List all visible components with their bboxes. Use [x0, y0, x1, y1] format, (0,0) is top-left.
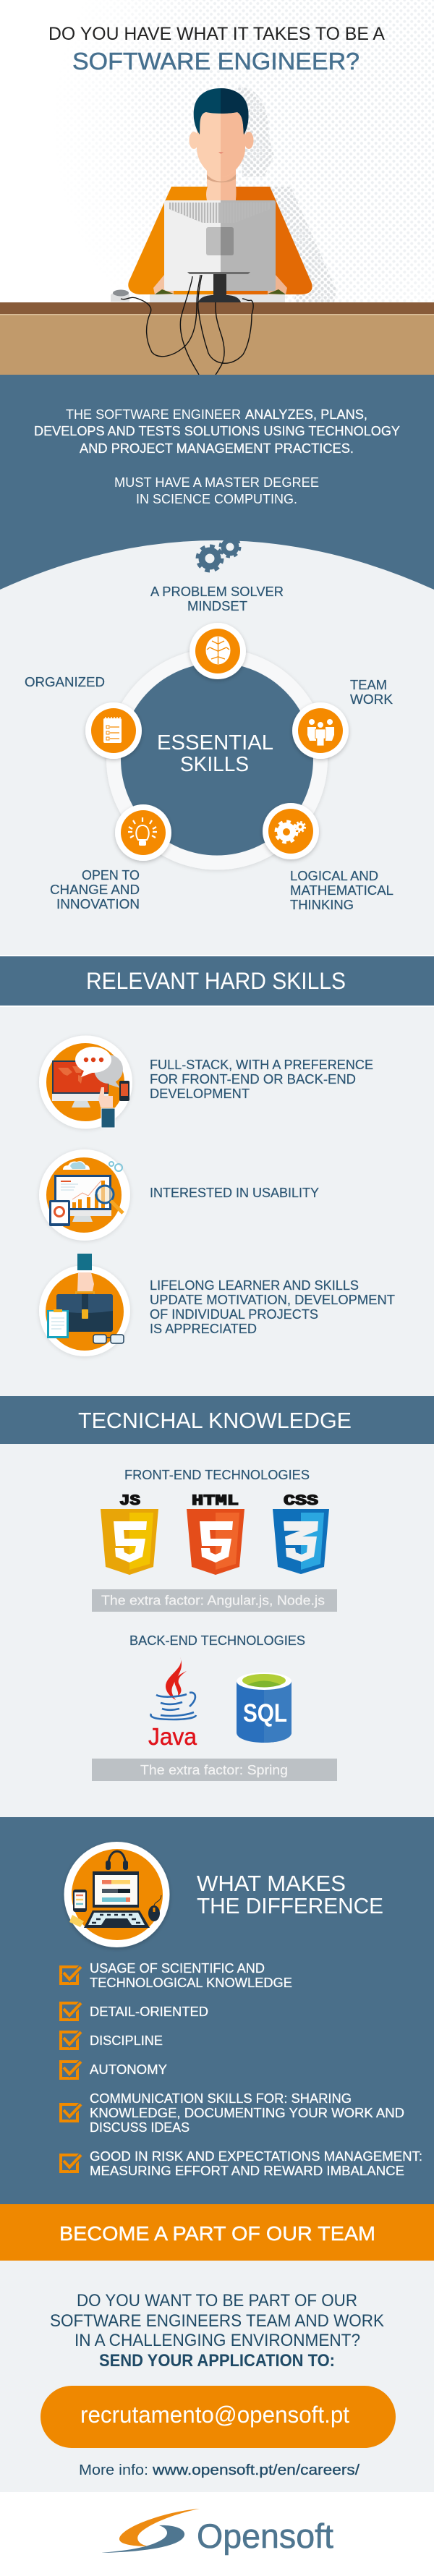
checklist item: usage: TECHNOLOGICAL KNOWLEDGE: [90, 1975, 292, 1990]
text: full-stack: DEVELOPMENT: [150, 1086, 250, 1101]
checklist item: detail-oriented: DETAIL-ORIENTED: [90, 2004, 208, 2019]
email button: [41, 2386, 396, 2448]
hands: [153, 275, 287, 294]
text: usability: INTERESTED IN USABILITY: [150, 1185, 319, 1200]
title: SOFTWARE ENGINEER?: [72, 48, 359, 75]
heading: what makes the difference: THE DIFFERENCE: [197, 1893, 383, 1918]
heading: essential skills: SKILLS: [180, 753, 249, 776]
text: full-stack: FULL-STACK, WITH A PREFERENCE: [150, 1057, 373, 1072]
band: relevant hard skills: [0, 955, 434, 1007]
label: open to change: INNOVATION: [56, 896, 140, 911]
more info: [79, 2462, 359, 2478]
label: logical thinking: [290, 868, 393, 912]
text: full-stack: [150, 1057, 373, 1101]
header background halftone: [106, 0, 434, 302]
panel: technical knowledge: [0, 1444, 434, 1817]
label: problem solver: A PROBLEM SOLVER: [150, 584, 284, 599]
intro paragraph: MUST HAVE A MASTER DEGREE: [114, 475, 319, 490]
logo: css: [273, 1493, 329, 1574]
email button: recrutamento@opensoft.pt: [80, 2402, 349, 2428]
band: technical knowledge: TECNICHAL KNOWLEDGE: [78, 1408, 352, 1433]
face: [197, 109, 245, 177]
checklist item: discipline: [61, 2032, 163, 2049]
text: lifelong learner: [150, 1278, 395, 1336]
icon: team: [292, 702, 349, 759]
icon: usability: [39, 1149, 130, 1241]
icon: logic gears: [263, 803, 319, 859]
footer: opensoft logo: [0, 2492, 434, 2576]
desk: [0, 302, 434, 375]
label: logical thinking: THINKING: [290, 897, 354, 912]
icon: workstation: [64, 1842, 169, 1947]
heading: front-end: FRONT-END TECHNOLOGIES: [124, 1467, 310, 1482]
orange shirt: [128, 187, 312, 294]
panel: intro on blue: [0, 375, 434, 592]
icon: notepad: [85, 702, 142, 759]
label: open to change: OPEN TO: [82, 867, 140, 883]
monitor stand: [198, 274, 241, 302]
person drop shadow: [238, 87, 336, 302]
band: become a part of our team: [0, 2204, 434, 2261]
intro paragraph: AND PROJECT MANAGEMENT PRACTICES.: [80, 441, 354, 456]
label: problem solver: [150, 584, 284, 613]
logo: js: JS: [119, 1493, 140, 1510]
heading: back-end: BACK-END TECHNOLOGIES: [129, 1633, 305, 1648]
panel: what makes the difference: [0, 1817, 434, 2204]
label: team work: TEAM: [350, 677, 387, 692]
heading: essential skills: ESSENTIAL: [157, 731, 273, 754]
icon: brain: [190, 623, 246, 679]
extra factor: front-end: The extra factor: Angular.js, Node.js: [101, 1593, 325, 1607]
invitation text: SEND YOUR APPLICATION TO:: [99, 2351, 335, 2371]
logo wordmark: Opensoft: [197, 2517, 333, 2555]
skills ring: [106, 648, 328, 870]
text: lifelong learner: IS APPRECIATED: [150, 1321, 257, 1336]
extra factor: front-end: [92, 1589, 337, 1612]
checklist item: autonomy: AUTONOMY: [90, 2062, 167, 2077]
intro paragraph: THE SOFTWARE ENGINEER: [66, 407, 241, 422]
label: problem solver: MINDSET: [187, 598, 247, 613]
label: team work: WORK: [350, 692, 393, 707]
more info: More info:: [79, 2462, 148, 2478]
extra factor: back-end: [92, 1759, 337, 1781]
logo: sql: [237, 1672, 292, 1743]
checklist item: autonomy: [61, 2062, 167, 2078]
band: relevant hard skills: RELEVANT HARD SKILLS: [86, 968, 346, 994]
intro paragraph: DEVELOPS AND TESTS SOLUTIONS USING TECHNOLOGY: [34, 423, 400, 438]
cables: [121, 275, 253, 375]
logo: js: [101, 1493, 158, 1575]
intro paragraph: ANALYZES, PLANS,: [245, 407, 367, 422]
logo: java: Java: [148, 1723, 197, 1750]
checklist item: usage: USAGE OF SCIENTIFIC AND: [90, 1960, 265, 1976]
checklist item: usage: [61, 1960, 292, 1990]
heading: what makes the difference: [197, 1871, 383, 1918]
more info: www.opensoft.pt/en/careers/: [152, 2462, 359, 2478]
panel: call to action: [0, 2261, 434, 2492]
logo swoosh: [101, 2509, 200, 2553]
icon: briefcase: [39, 1254, 130, 1356]
text: lifelong learner: LIFELONG LEARNER AND SKILLS: [150, 1278, 359, 1293]
keyboard and mouse: [111, 289, 285, 302]
logo: html: [187, 1493, 244, 1575]
checklist item: risk management: MEASURING EFFORT AND REWARD IMBALANCE: [90, 2163, 404, 2178]
checklist item: communication: DISCUSS IDEAS: [90, 2120, 190, 2135]
label: logical thinking: LOGICAL AND: [290, 868, 378, 883]
heading: essential skills: [157, 731, 273, 776]
icon: gears: [197, 537, 240, 571]
intro paragraph: [34, 407, 400, 506]
neck and ears: [190, 132, 253, 203]
invitation text: [50, 2291, 384, 2371]
logo: java: [148, 1657, 197, 1750]
label: organized: ORGANIZED: [25, 674, 105, 689]
label: open to change: [50, 867, 140, 911]
title: DO YOU HAVE WHAT IT TAKES TO BE A: [48, 24, 385, 44]
checklist item: risk management: GOOD IN RISK AND EXPECTATIONS MANAGEMENT:: [90, 2148, 422, 2164]
checklist item: discipline: DISCIPLINE: [90, 2033, 163, 2048]
hair: [194, 88, 248, 135]
heading: what makes the difference: WHAT MAKES: [197, 1871, 346, 1896]
monitor back: [164, 200, 276, 291]
invitation text: IN A CHALLENGING ENVIRONMENT?: [75, 2331, 360, 2350]
icon: light bulb: [115, 804, 171, 861]
panel: essential skills: [0, 537, 434, 956]
invitation text: DO YOU WANT TO BE PART OF OUR: [77, 2291, 357, 2311]
intro paragraph: IN SCIENCE COMPUTING.: [136, 491, 297, 506]
text: lifelong learner: UPDATE MOTIVATION, DEVELOPMENT: [150, 1292, 395, 1307]
checklist item: communication: [61, 2091, 404, 2135]
logo: css: CSS: [284, 1493, 318, 1510]
invitation text: SOFTWARE ENGINEERS TEAM AND WORK: [50, 2311, 384, 2331]
text: full-stack: FOR FRONT-END OR BACK-END: [150, 1071, 356, 1087]
band: technical knowledge: [0, 1396, 434, 1444]
logo: sql: SQL: [243, 1699, 287, 1727]
checklist item: communication: KNOWLEDGE, DOCUMENTING YOUR WORK AND: [90, 2105, 404, 2120]
logo: html: HTML: [192, 1493, 239, 1510]
checklist item: communication: COMMUNICATION SKILLS FOR: SHARING: [90, 2091, 352, 2106]
text: lifelong learner: OF INDIVIDUAL PROJECTS: [150, 1306, 318, 1322]
illustration: engineer at desk: [0, 87, 434, 375]
band: become a part of our team: BECOME A PART OF OUR TEAM: [59, 2222, 375, 2245]
label: open to change: CHANGE AND: [50, 882, 140, 897]
extra factor: back-end: The extra factor: Spring: [140, 1762, 288, 1777]
icon: full-stack: [39, 1036, 132, 1128]
label: logical thinking: MATHEMATICAL: [290, 883, 393, 898]
panel: hard skills: [0, 1007, 434, 1396]
title: [48, 24, 385, 75]
label: team work: [350, 677, 393, 707]
checklist item: risk management: [61, 2148, 422, 2178]
